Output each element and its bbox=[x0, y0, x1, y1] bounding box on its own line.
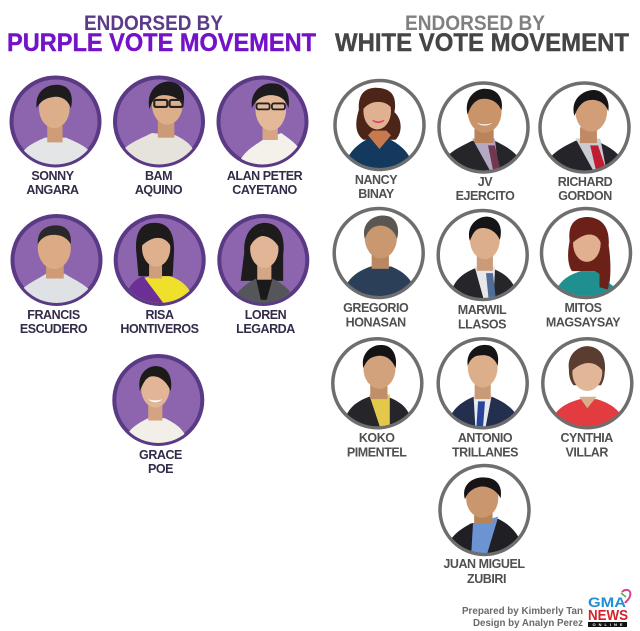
credits: Prepared by Kimberly Tan bbox=[462, 605, 583, 617]
credits bbox=[462, 605, 583, 629]
candidate: Grace Poe bbox=[114, 356, 202, 476]
candidate: Gregorio Honasan: HONASAN bbox=[346, 316, 406, 330]
candidate: Nancy Binay: BINAY bbox=[358, 187, 395, 201]
candidate: Francis Escudero bbox=[11, 216, 100, 336]
heading: white vote movement bbox=[335, 12, 629, 57]
candidate: Risa Hontiveros bbox=[116, 216, 204, 336]
candidate: Juan Miguel Zubiri: ZUBIRI bbox=[467, 572, 506, 586]
candidate: Cynthia Villar: VILLAR bbox=[565, 446, 608, 460]
candidate: Marwil Llasos: MARWIL bbox=[458, 303, 507, 317]
candidate: Marwil Llasos bbox=[438, 210, 527, 332]
candidate: Mitos Magsaysay: MAGSAYSAY bbox=[546, 316, 621, 330]
candidate: Alan Peter Cayetano: ALAN PETER bbox=[227, 169, 303, 183]
logo: GMA News Online: GMA bbox=[588, 594, 626, 610]
candidate: Juan Miguel Zubiri bbox=[440, 466, 529, 586]
heading: white vote movement: WHITE VOTE MOVEMENT bbox=[335, 29, 629, 57]
candidate: Bam Aquino bbox=[114, 78, 203, 197]
candidate: Nancy Binay bbox=[335, 80, 424, 201]
candidate: Risa Hontiveros: HONTIVEROS bbox=[120, 322, 199, 336]
candidate: Loren Legarda: LOREN bbox=[245, 308, 287, 322]
candidate: Mitos Magsaysay bbox=[542, 208, 630, 330]
heading: purple vote movement: PURPLE VOTE MOVEMENT bbox=[7, 29, 316, 57]
candidate: Richard Gordon bbox=[540, 83, 629, 203]
candidate: Risa Hontiveros: RISA bbox=[145, 308, 174, 322]
candidate: Bam Aquino: BAM bbox=[145, 169, 172, 183]
candidate: Bam Aquino: AQUINO bbox=[135, 183, 183, 197]
candidate: Koko Pimentel: KOKO bbox=[359, 431, 395, 445]
candidate: Richard Gordon: GORDON bbox=[558, 189, 612, 203]
candidate: Sonny Angara bbox=[12, 78, 100, 197]
heading: white vote movement: ENDORSED BY bbox=[405, 12, 545, 35]
candidate: Sonny Angara: SONNY bbox=[31, 169, 75, 183]
candidate: JV Ejercito bbox=[438, 83, 528, 203]
candidate: Gregorio Honasan: GREGORIO bbox=[343, 301, 409, 315]
candidate: Gregorio Honasan bbox=[334, 208, 423, 330]
candidate: Loren Legarda: LEGARDA bbox=[236, 322, 295, 336]
candidate: JV Ejercito: EJERCITO bbox=[456, 189, 515, 203]
candidate: Sonny Angara: ANGARA bbox=[26, 183, 79, 197]
candidate: Loren Legarda bbox=[219, 216, 307, 336]
logo: GMA News Online: ONLINE bbox=[592, 622, 623, 627]
candidate: Francis Escudero: ESCUDERO bbox=[20, 322, 88, 336]
candidate: Nancy Binay: NANCY bbox=[355, 173, 398, 187]
logo: GMA News Online bbox=[588, 590, 630, 627]
candidate: Alan Peter Cayetano bbox=[218, 78, 306, 197]
heading: purple vote movement: ENDORSED BY bbox=[84, 12, 223, 35]
candidate: Antonio Trillanes: ANTONIO bbox=[458, 431, 513, 445]
candidate: Alan Peter Cayetano: CAYETANO bbox=[232, 183, 297, 197]
candidate: Koko Pimentel bbox=[333, 339, 422, 460]
candidate: Antonio Trillanes bbox=[438, 339, 527, 460]
candidate: Richard Gordon: RICHARD bbox=[558, 175, 613, 189]
candidate: Juan Miguel Zubiri: JUAN MIGUEL bbox=[443, 557, 525, 571]
candidate: Koko Pimentel: PIMENTEL bbox=[347, 446, 407, 460]
candidate: Cynthia Villar: CYNTHIA bbox=[560, 431, 613, 445]
credits: Design by Analyn Perez bbox=[473, 617, 583, 629]
logo: GMA News Online: NEWS bbox=[588, 607, 628, 624]
candidate: Antonio Trillanes: TRILLANES bbox=[452, 446, 518, 460]
candidate: Cynthia Villar bbox=[543, 339, 632, 460]
candidate: Grace Poe: POE bbox=[148, 462, 173, 476]
heading: purple vote movement bbox=[7, 12, 316, 57]
candidate: JV Ejercito: JV bbox=[478, 175, 493, 189]
candidate: Francis Escudero: FRANCIS bbox=[27, 308, 80, 322]
candidate: Marwil Llasos: LLASOS bbox=[458, 318, 506, 332]
candidate: Grace Poe: GRACE bbox=[139, 448, 182, 462]
candidate: Mitos Magsaysay: MITOS bbox=[564, 301, 602, 315]
